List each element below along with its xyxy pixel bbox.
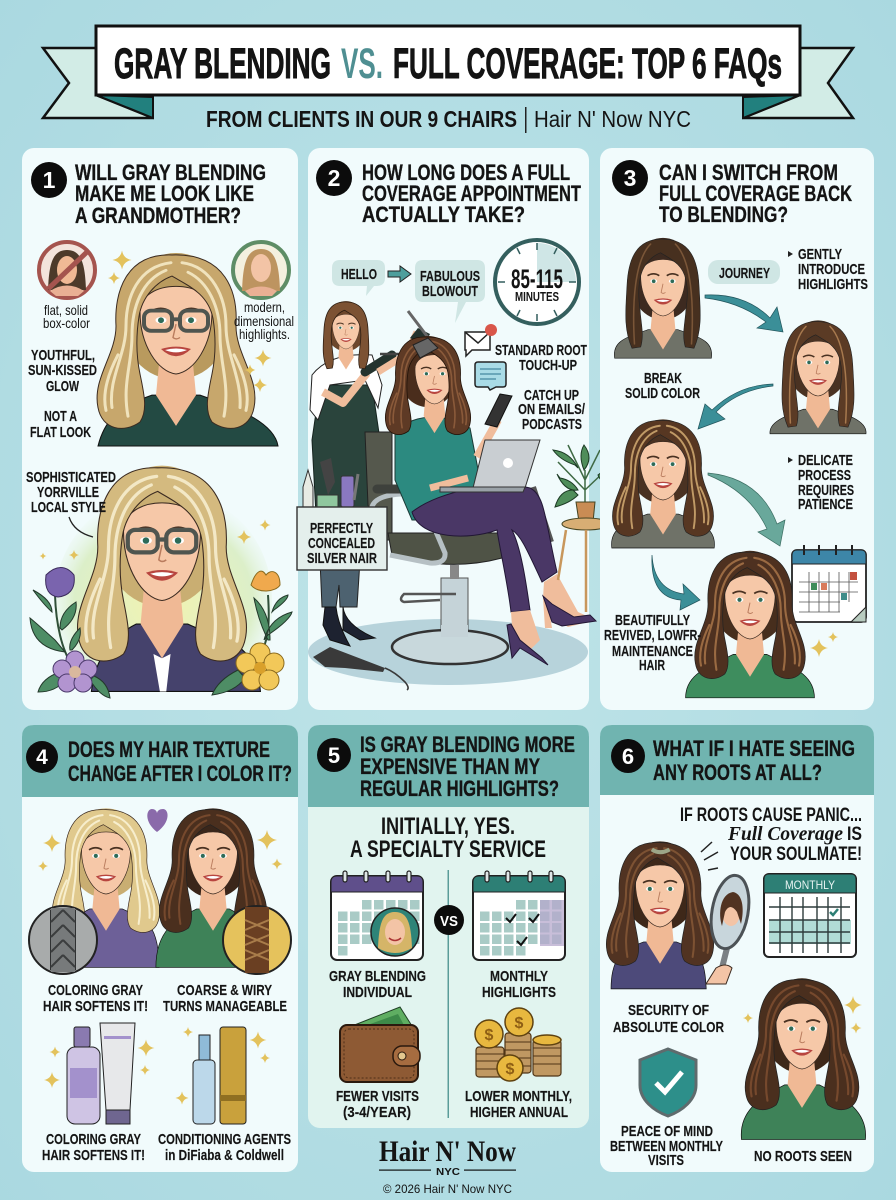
label: catch up: CATCH UP — [524, 387, 579, 404]
number badge 2: 2 — [328, 165, 340, 191]
number badge 4: 4 — [36, 746, 48, 769]
header band 5 — [308, 725, 589, 807]
label: youthful glow: GLOW — [46, 378, 80, 395]
caption: coarse and wiry: TURNS MANAGEABLE — [163, 998, 287, 1015]
icon: hand mirror — [701, 842, 754, 984]
label: gently introduce: INTRODUCE — [798, 261, 865, 278]
caption: security of absolute color — [613, 1002, 724, 1036]
vs badge — [434, 905, 464, 935]
label: revived low maintenance: MAINTENANCE — [612, 643, 693, 660]
caption: lower monthly: HIGHER ANNUAL — [470, 1104, 568, 1121]
clock: 85-115 minutes — [495, 240, 579, 324]
label: standard root touch-up: TOUCH-UP — [519, 357, 577, 374]
caption: monthly highlights: HIGHLIGHTS — [482, 984, 556, 1001]
subtitle: Hair N' Now NYC — [534, 106, 691, 132]
caption: coarse and wiry: COARSE & WIRY — [177, 982, 272, 999]
heading 1 — [75, 160, 266, 228]
heading 2: COVERAGE APPOINTMENT — [362, 181, 581, 206]
label: catch up: PODCASTS — [522, 416, 582, 433]
caption: fewer visits: (3-4/YEAR) — [343, 1104, 411, 1121]
portrait: blended brunette — [612, 419, 714, 548]
heading 2: ACTUALLY TAKE? — [362, 202, 525, 227]
label: revived low maintenance: HAIR — [639, 657, 665, 674]
icon: coin stacks: $ — [515, 1015, 524, 1032]
label: catch up: ON EMAILS/ — [518, 401, 586, 418]
label: gently introduce: HIGHLIGHTS — [798, 276, 868, 293]
icon: flat box color crossed out — [39, 242, 95, 298]
portrait: sophisticated local — [78, 466, 260, 691]
caption: fewer visits: FEWER VISITS — [336, 1088, 419, 1105]
portrait: blonde — [52, 808, 160, 967]
caption: coarse and wiry — [163, 982, 287, 1015]
divider — [448, 870, 449, 1118]
footer logo — [379, 1135, 516, 1178]
caption: lower monthly: LOWER MONTHLY, — [465, 1088, 572, 1105]
arrow — [705, 295, 783, 332]
callout: soulmate — [680, 805, 862, 865]
caption: softens: HAIR SOFTENS IT! — [43, 998, 148, 1015]
number badge 5 — [317, 738, 351, 772]
caption: fewer visits — [336, 1088, 419, 1121]
caption: flat, solid — [43, 302, 90, 331]
speech bubble: blowout: BLOWOUT — [422, 283, 478, 300]
label: not a flat look: FLAT LOOK — [30, 424, 91, 441]
number badge 6 — [611, 739, 645, 773]
label: Yorkville local style: SOPHISTICATED — [26, 469, 116, 486]
icon: wallet — [340, 1007, 420, 1082]
caption: flat, solid: box-color — [43, 315, 90, 331]
clock: 85-115 minutes: MINUTES — [515, 289, 559, 304]
vs badge: VS — [440, 913, 458, 930]
caption: modern highlights: highlights. — [239, 326, 290, 342]
label: delicate process: PROCESS — [798, 467, 851, 484]
heading 5: IS GRAY BLENDING MORE — [360, 732, 575, 757]
title banner: VS. — [341, 40, 383, 88]
label: delicate process: PATIENCE — [798, 496, 853, 513]
label: youthful glow: YOUTHFUL, — [31, 347, 95, 364]
heading 1: WILL GRAY BLENDING — [75, 160, 266, 185]
calendar — [792, 545, 866, 622]
comb and clip — [313, 647, 408, 690]
heading 3 — [659, 160, 852, 227]
arrow — [388, 266, 411, 282]
speech bubble: hello: HELLO — [341, 266, 377, 283]
caption: monthly highlights: MONTHLY — [490, 968, 548, 985]
caption: conditioning agents — [158, 1131, 291, 1164]
callout: soulmate: IS — [847, 824, 862, 845]
portrait background glow — [55, 492, 272, 690]
portrait: solid color — [614, 238, 712, 358]
portrait: blonde woman with glasses — [97, 253, 278, 446]
number badge 3: 3 — [624, 165, 636, 191]
icon: coin stacks: $ — [485, 1027, 494, 1044]
salon chair — [365, 432, 551, 664]
arrow — [708, 473, 785, 546]
label: Yorkville local style — [26, 469, 116, 537]
product cart — [303, 458, 358, 507]
heading 3: CAN I SWITCH FROM — [659, 160, 838, 185]
label: revived low maintenance: REVIVED, LOWFR- — [604, 627, 701, 644]
caption: gray blending individual: INDIVIDUAL — [343, 984, 412, 1001]
flowers — [30, 520, 292, 698]
calendar: monthly — [764, 874, 856, 957]
caption: monthly highlights — [482, 968, 556, 1001]
panel 6: hate seeing roots — [600, 725, 874, 1172]
label: catch up — [518, 387, 586, 433]
label: revived low maintenance — [604, 612, 701, 674]
salon floor — [308, 619, 588, 685]
callout: soulmate: Full Coverage — [727, 823, 843, 845]
calendar: monthly: MONTHLY — [785, 878, 835, 892]
footer logo: NYC — [436, 1166, 460, 1178]
header band 4 — [22, 725, 298, 797]
header band 6 — [600, 725, 874, 795]
label: standard root touch-up — [495, 342, 587, 374]
caption: no roots seen: NO ROOTS SEEN — [754, 1148, 852, 1165]
portrait: introducing highlights — [770, 320, 866, 434]
title banner: GRAY BLENDING — [114, 40, 331, 88]
label: not a flat look — [30, 408, 91, 441]
label card: concealed silver: SILVER NAIR — [307, 550, 377, 567]
portrait: worried woman — [606, 841, 714, 989]
icon: spray and gold can — [176, 1027, 270, 1124]
caption: gray blending individual — [329, 968, 426, 1001]
icon: coin stacks: $ — [506, 1061, 515, 1078]
label: gently introduce — [788, 246, 868, 293]
arrow — [652, 555, 700, 610]
icon: chat bubble — [475, 362, 506, 390]
number badge 4 — [26, 741, 58, 773]
label card: concealed silver: CONCEALED — [308, 535, 375, 552]
caption: security of absolute color: SECURITY OF — [628, 1002, 709, 1019]
number badge 5: 5 — [328, 743, 340, 768]
caption: peace of mind: PEACE OF MIND — [621, 1123, 713, 1140]
caption: conditioning agents: CONDITIONING AGENTS — [158, 1131, 291, 1148]
pill: journey — [708, 260, 780, 284]
panel 3: switch back to blending — [600, 148, 874, 710]
icon: heart — [147, 809, 168, 832]
client with laptop — [385, 336, 596, 665]
heading 3: TO BLENDING? — [659, 202, 788, 227]
caption: lower monthly — [465, 1088, 572, 1121]
number badge 3 — [612, 160, 648, 196]
number badge 1: 1 — [43, 167, 56, 193]
clock: 85-115 minutes: 85-115 — [511, 264, 563, 294]
panel 1: grandmother — [22, 148, 298, 710]
label card: concealed silver — [297, 507, 387, 570]
answer: initially yes: INITIALLY, YES. — [381, 813, 515, 840]
heading 6: ANY ROOTS AT ALL? — [653, 760, 822, 785]
sparkles — [108, 250, 272, 392]
caption: modern highlights — [234, 299, 294, 342]
footer logo: Hair N' Now — [379, 1135, 516, 1168]
label: youthful glow: SUN-KISSED — [28, 362, 97, 379]
label: standard root touch-up: STANDARD ROOT — [495, 342, 587, 359]
caption: gray blending individual: GRAY BLENDING — [329, 968, 426, 985]
speech bubble: blowout: FABULOUS — [420, 268, 480, 285]
caption: modern highlights: dimensional — [234, 313, 294, 329]
label: gently introduce: GENTLY — [798, 246, 842, 263]
calendar: monthly highlights — [473, 871, 565, 960]
answer: initially yes — [350, 813, 546, 863]
caption: peace of mind: VISITS — [648, 1152, 684, 1169]
portrait: no roots — [741, 978, 866, 1140]
label: youthful glow — [28, 347, 97, 395]
label: break solid color: BREAK — [644, 370, 682, 387]
heading 5 — [360, 732, 575, 801]
panel 2: appointment length — [297, 148, 612, 710]
heading 5: EXPENSIVE THAN MY — [360, 754, 540, 779]
caption: softens: COLORING GRAY — [46, 1131, 141, 1148]
heading 1: A GRANDMOTHER? — [75, 203, 241, 228]
speech bubble: hello — [332, 260, 385, 296]
label: Yorkville local style: LOCAL STYLE — [31, 499, 106, 516]
caption: peace of mind — [610, 1123, 723, 1169]
heading 4: CHANGE AFTER I COLOR IT? — [68, 761, 292, 786]
caption: modern highlights: modern, — [244, 299, 285, 315]
label: delicate process — [788, 452, 854, 513]
caption: softens — [43, 982, 148, 1015]
sparkles — [743, 996, 862, 1034]
copyright: © 2026 Hair N' Now NYC — [383, 1182, 512, 1196]
title banner — [43, 26, 853, 118]
label: revived low maintenance: BEAUTIFULLY — [615, 612, 690, 629]
caption: security of absolute color: ABSOLUTE COLOR — [613, 1019, 724, 1036]
caption: softens: HAIR SOFTENS IT! — [42, 1147, 145, 1164]
icon: modern highlights — [233, 242, 289, 298]
panel 4: hair texture — [22, 725, 298, 1172]
label: delicate process: DELICATE — [798, 452, 853, 469]
heading 5: REGULAR HIGHLIGHTS? — [360, 776, 559, 801]
icon: shield check — [640, 1049, 696, 1116]
heading 1: MAKE ME LOOK LIKE — [75, 181, 254, 206]
caption: softens: COLORING GRAY — [48, 982, 143, 999]
heading 4 — [68, 737, 292, 786]
speech bubble: blowout — [415, 260, 485, 323]
icon: coin stacks — [475, 1008, 561, 1081]
portrait: brunette — [156, 808, 267, 967]
portrait: revived hair — [686, 551, 814, 698]
icon: purple bottle and tube — [44, 1023, 154, 1124]
panel 5: expense — [308, 725, 589, 1128]
number badge 1 — [31, 162, 67, 198]
label card: concealed silver: PERFECTLY — [310, 520, 373, 537]
subtitle: FROM CLIENTS IN OUR 9 CHAIRS — [206, 106, 517, 132]
sparkles — [38, 830, 282, 871]
heading 2 — [362, 160, 581, 227]
heading 2: HOW LONG DOES A FULL — [362, 160, 570, 185]
caption: conditioning agents: in DiFiaba & Coldwell — [165, 1147, 284, 1164]
number badge 2 — [316, 160, 352, 196]
label: not a flat look: NOT A — [44, 408, 77, 425]
heading 6 — [653, 736, 855, 785]
label: break solid color: SOLID COLOR — [625, 385, 700, 402]
pill: journey: JOURNEY — [719, 265, 770, 282]
label: Yorkville local style: YORRVILLE — [37, 484, 99, 501]
heading 4: DOES MY HAIR TEXTURE — [68, 737, 270, 762]
sparkle — [810, 632, 838, 657]
texture circle: coarse gray — [29, 906, 97, 974]
caption: peace of mind: BETWEEN MONTHLY — [610, 1138, 723, 1155]
caption: softens — [42, 1131, 145, 1164]
number badge 6: 6 — [622, 744, 634, 769]
answer: initially yes: A SPECIALTY SERVICE — [350, 836, 546, 863]
label: delicate process: REQUIRES — [798, 482, 854, 499]
stylist — [310, 301, 436, 646]
texture circle: manageable — [223, 906, 291, 974]
arrow — [698, 384, 773, 429]
label: break solid color — [625, 370, 700, 402]
plant on side table — [553, 445, 612, 612]
icon: client portrait — [371, 908, 419, 956]
caption: flat, solid: flat, solid — [44, 302, 88, 318]
calendar: gray blending — [331, 871, 423, 960]
icon: envelope — [465, 324, 497, 356]
